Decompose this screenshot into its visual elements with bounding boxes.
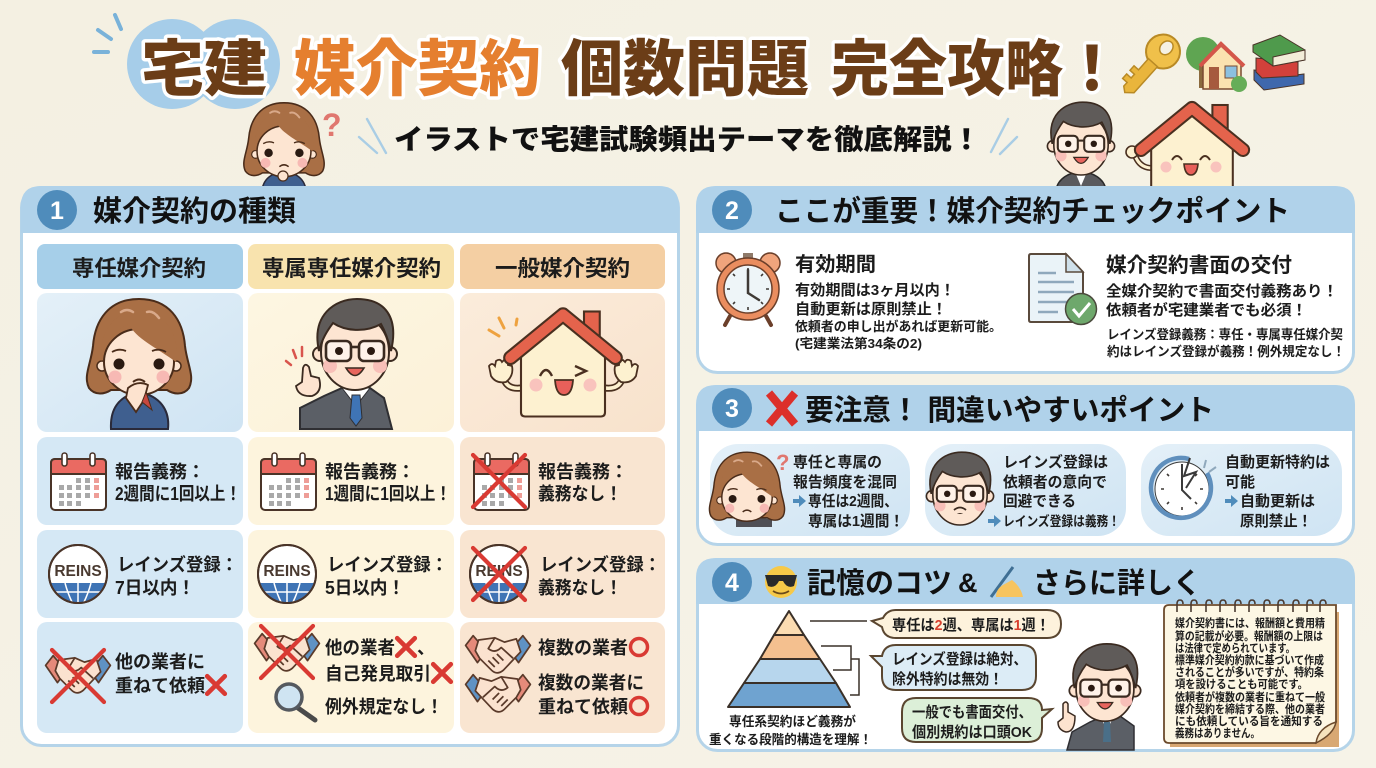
column header: senzoku <box>248 244 454 289</box>
speech bubble: weeks <box>872 610 1061 638</box>
icon: red cross <box>769 393 795 424</box>
icon: key <box>1113 28 1187 105</box>
card: auto renewal <box>1141 444 1342 536</box>
card: frequency mix-up: 専属は1週間！ <box>808 512 904 530</box>
panel 4 heading: 記憶のコツ <box>807 567 952 600</box>
title: 宅建 <box>141 35 267 103</box>
row: reporting duty, ippan: 報告義務： <box>538 462 628 482</box>
row: reporting duty, senin <box>37 437 243 525</box>
character: pointing man <box>1058 644 1141 750</box>
panel 1 number <box>37 190 77 230</box>
icon: document with check <box>1029 254 1096 324</box>
row: REINS, senzoku: REINS <box>263 563 311 580</box>
card: REINS avoidance: レインズ登録は <box>1003 453 1108 471</box>
row: other agents, ippan <box>460 622 665 733</box>
column header: senin: 専任媒介契約 <box>72 256 206 281</box>
title <box>141 35 1121 103</box>
character: thinking woman (header) <box>244 103 324 190</box>
pyramid connectors <box>810 621 867 695</box>
notepad text: されることが多いですが、特約条 <box>1175 665 1324 679</box>
row: REINS, senzoku <box>248 530 454 618</box>
panel 3 header bar <box>696 385 1355 431</box>
speech bubble: weeks: 専任は2週、専属は1週！ <box>892 616 1050 634</box>
notepad text: 依頼者が複数の業者に重ねて一般 <box>1175 690 1325 704</box>
block: validity period: 有効期間は3ヶ月以内！ <box>795 282 955 299</box>
card: auto renewal: 原則禁止！ <box>1240 513 1312 530</box>
card: REINS avoidance: 回避できる <box>1003 492 1076 510</box>
panel 2 number: 2 <box>725 197 739 225</box>
panel 2 heading: ここが重要！媒介契約チェックポイント <box>775 194 1290 228</box>
block: written contract delivery: 全媒介契約で書面交付義務あり！ <box>1106 282 1338 300</box>
speech bubble: general contract: 一般でも書面交付、 <box>912 703 1032 721</box>
notepad with details <box>1164 600 1339 747</box>
row: other agents, ippan: 複数の業者 <box>538 638 628 658</box>
speech bubble: REINS: 除外特約は無効！ <box>892 670 1003 688</box>
row: other agents, ippan: 重ねて依頼 <box>538 697 628 717</box>
title: 媒介契約 <box>294 35 541 103</box>
speech bubble: general contract <box>902 698 1052 742</box>
panel 4 number: 4 <box>725 569 739 597</box>
card: frequency mix-up: ? <box>776 450 789 475</box>
row: reporting duty, ippan: 義務なし！ <box>538 484 622 504</box>
speech bubble: REINS <box>871 645 1036 690</box>
row: reporting duty, senin: 報告義務： <box>115 462 205 482</box>
row: other agents, senin: 重ねて依頼 <box>115 676 205 696</box>
icon: question mark: ? <box>322 107 342 143</box>
panel 4 number <box>712 562 752 602</box>
speech bubble: general contract: 個別規約は口頭OK <box>912 724 1032 741</box>
panel 2: check points <box>696 186 1355 372</box>
icon: sunglasses emoji <box>765 566 797 598</box>
row: other agents, senzoku <box>248 622 454 733</box>
row: REINS, senin: REINS <box>54 563 102 580</box>
row: REINS, ippan: REINS <box>475 563 523 580</box>
row: other agents, senzoku: 自己発見取引 <box>325 664 431 684</box>
card: auto renewal: 自動更新は <box>1240 492 1315 510</box>
icon: magnifier <box>276 684 315 720</box>
row: other agents, ippan: 複数の業者に <box>538 673 644 693</box>
row: reporting duty, senzoku: 報告義務： <box>325 462 415 482</box>
notepad text: 標準媒介契約約款に基づいて作成 <box>1175 653 1324 667</box>
row: reporting duty, senzoku <box>248 437 454 525</box>
panel 3 number <box>712 388 752 428</box>
panel 1 number: 1 <box>50 197 64 225</box>
card: auto renewal: 自動更新特約は <box>1225 453 1330 471</box>
title badge circles <box>127 19 280 109</box>
row: other agents, senzoku: 他の業者 <box>325 638 395 658</box>
row: other agents, senzoku: 例外規定なし！ <box>325 697 443 717</box>
row: reporting duty, senzoku: 1週間に1回以上！ <box>325 484 451 504</box>
title accent strokes <box>94 15 121 52</box>
column header: senzoku: 専属専任媒介契約 <box>262 256 441 281</box>
title: 個数問題 <box>561 35 809 103</box>
row: REINS, senin <box>37 530 243 618</box>
notepad text: 媒介契約書には、報酬額と費用精 <box>1175 616 1325 630</box>
row: reporting duty, ippan <box>460 437 665 525</box>
notepad text: 義務はありません。 <box>1175 726 1260 740</box>
subtitle: イラストで宅建試験頻出テーマを徹底解説！ <box>394 124 981 155</box>
row: other agents, senin <box>37 622 243 733</box>
column header: ippan: 一般媒介契約 <box>495 256 630 281</box>
notepad text <box>1175 616 1325 740</box>
block: validity period: (宅建業法第34条の2) <box>795 336 922 351</box>
panel 4 heading continued: さらに詳しく <box>1033 567 1201 600</box>
row: REINS, senin: 7日以内！ <box>115 578 195 598</box>
panel 2 header bar <box>696 186 1355 233</box>
row: REINS, ippan: 義務なし！ <box>538 578 622 598</box>
row: other agents, senin: 他の業者に <box>115 652 205 672</box>
notepad text: は法律で定められています。 <box>1175 641 1295 655</box>
panel 4: memory tips <box>696 558 1355 750</box>
icon: writing hand emoji <box>991 567 1023 597</box>
notepad text: にも依頼している旨を通知する <box>1175 714 1323 728</box>
column header: senin <box>37 244 243 289</box>
panel 1 header bar <box>21 186 679 233</box>
panel 2 number <box>712 190 752 230</box>
block: written contract delivery <box>1106 254 1345 359</box>
card: frequency mix-up: 専任と専属の <box>793 453 882 471</box>
pyramid caption: 専任系契約ほど義務が <box>729 714 856 729</box>
column header: ippan <box>460 244 665 289</box>
notepad text: 項を設けることも可能です。 <box>1175 677 1308 691</box>
subtitle accents <box>359 119 1017 154</box>
block: validity period <box>795 253 1002 351</box>
block: written contract delivery: 約はレインズ登録が義務！例外規定なし！ <box>1107 344 1345 359</box>
row: reporting duty, senin: 2週間に1回以上！ <box>115 484 241 504</box>
panel 3 number: 3 <box>725 395 739 423</box>
title: 完全攻略！ <box>831 35 1121 103</box>
card: auto renewal: 可能 <box>1225 473 1255 491</box>
icon: alarm clock <box>716 253 780 325</box>
block: written contract delivery: 依頼者が宅建業者でも必須！ <box>1106 301 1307 319</box>
illustration cell: worried woman <box>37 293 243 432</box>
card: frequency mix-up: 報告頻度を混同 <box>793 473 897 491</box>
icon: books <box>1253 35 1305 90</box>
block: written contract delivery: 媒介契約書面の交付 <box>1106 254 1292 277</box>
row: REINS, senzoku: レインズ登録： <box>327 554 448 575</box>
character: waving house (header) <box>1126 105 1243 207</box>
character: guide man (header) <box>1047 102 1115 190</box>
block: validity period: 依頼者の申し出があれば更新可能。 <box>795 319 1002 334</box>
card: REINS avoidance: 依頼者の意向で <box>1003 473 1107 491</box>
ampersand: & <box>958 568 978 598</box>
card: frequency mix-up: 専任は2週間、 <box>808 492 898 510</box>
row: REINS, senzoku: 5日以内！ <box>325 578 405 598</box>
pyramid chart <box>728 611 850 707</box>
card: REINS avoidance <box>925 444 1126 536</box>
notepad text: 媒介契約を締結する際、他の業者 <box>1175 702 1325 716</box>
panel 1 heading: 媒介契約の種類 <box>93 195 296 228</box>
block: validity period: 自動更新は原則禁止！ <box>795 300 947 318</box>
row: REINS, ippan <box>460 530 665 618</box>
row: REINS, senin: レインズ登録： <box>117 554 238 575</box>
notepad text: 算の記載が必要。報酬額の上限は <box>1175 629 1323 643</box>
icon: house with tree <box>1186 37 1247 92</box>
illustration cell: happy house <box>460 293 665 432</box>
panel 1: types of brokerage contracts <box>21 186 679 746</box>
card: REINS avoidance: レインズ登録は義務！ <box>1003 513 1120 529</box>
speech bubble: REINS: レインズ登録は絶対、 <box>892 650 1027 668</box>
panel 3: common mistakes <box>696 385 1355 544</box>
block: validity period: 有効期間 <box>795 253 876 276</box>
row: REINS, ippan: レインズ登録： <box>540 554 661 575</box>
pyramid caption <box>709 714 872 747</box>
card: frequency mix-up <box>709 444 910 536</box>
panel 3 heading: 要注意！ 間違いやすいポイント <box>805 394 1214 427</box>
panel 4 header bar <box>696 558 1355 604</box>
block: written contract delivery: レインズ登録義務：専任・専属専任媒介契 <box>1107 327 1343 342</box>
illustration cell: pointing man <box>248 293 454 432</box>
row: other agents, senzoku: 、 <box>417 638 435 658</box>
notepad spiral rings <box>1177 600 1326 612</box>
pyramid caption: 重くなる段階的構造を理解！ <box>709 732 872 747</box>
